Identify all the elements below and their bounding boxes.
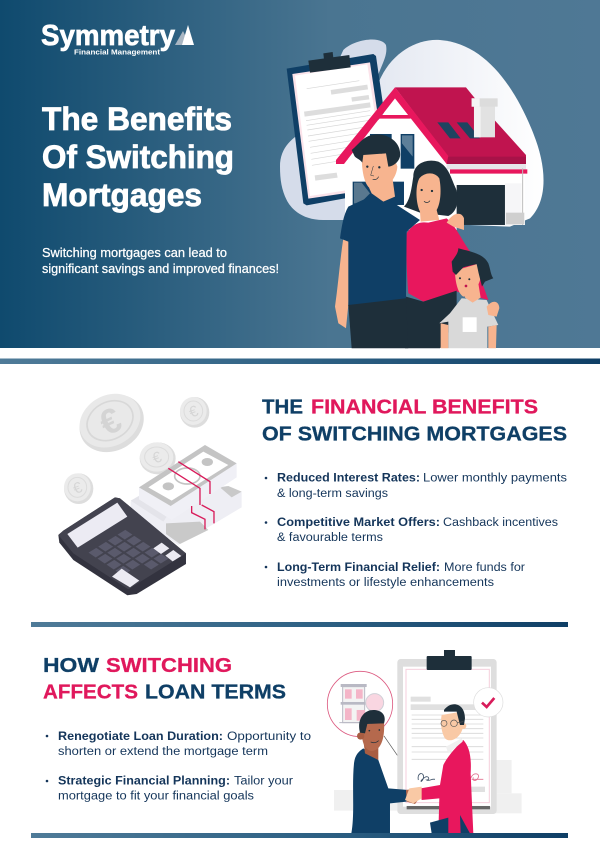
divider bar bbox=[31, 833, 568, 838]
check badge bbox=[474, 688, 503, 717]
bullet list: financial benefits: investments or lifestyle enhancements bbox=[277, 577, 494, 589]
left man bbox=[351, 710, 421, 833]
bullet list: financial benefits: & favourable terms bbox=[277, 532, 383, 544]
bullet list: financial benefits bbox=[265, 472, 567, 589]
panel: hero banner bbox=[0, 0, 600, 348]
title: The Benefits bbox=[42, 101, 232, 137]
white blob bbox=[347, 40, 544, 227]
bullet list: loan terms bbox=[46, 731, 311, 802]
woman bbox=[403, 161, 488, 348]
illustration: calculator, coins and money bbox=[58, 383, 242, 595]
clipboard bbox=[397, 650, 497, 814]
bullet list: loan terms: mortgage to fit your financial goals bbox=[58, 790, 254, 802]
thought bubble bbox=[327, 671, 397, 755]
bullet list: loan terms: Tailor your bbox=[234, 776, 293, 788]
title: Of Switching bbox=[42, 139, 234, 175]
bullet list: financial benefits: Lower monthly payments bbox=[423, 472, 567, 484]
logo: Symmetry bbox=[41, 20, 175, 52]
bullet list: financial benefits: More funds for bbox=[444, 562, 525, 574]
heading: financial benefits bbox=[262, 396, 567, 445]
title: Mortgages bbox=[42, 177, 202, 213]
bullet list: loan terms: Strategic Financial Planning: bbox=[58, 776, 230, 788]
heading: loan terms: AFFECTS bbox=[43, 680, 138, 704]
house bbox=[336, 87, 527, 230]
right man bbox=[405, 704, 473, 833]
heading: loan terms bbox=[43, 654, 286, 704]
light blob bbox=[280, 40, 386, 220]
title bbox=[42, 101, 234, 213]
heading: loan terms: LOAN TERMS bbox=[145, 680, 286, 704]
calculator bbox=[58, 497, 186, 595]
coins bbox=[64, 383, 209, 504]
divider stripe bbox=[0, 358, 600, 364]
heading: financial benefits: FINANCIAL BENEFITS bbox=[311, 396, 538, 418]
coins: € bbox=[93, 400, 128, 444]
bullet list: loan terms: Opportunity to bbox=[227, 731, 311, 743]
bullet list: loan terms: Renegotiate Loan Duration: bbox=[58, 731, 223, 743]
bullet list: financial benefits: Competitive Market Offers: bbox=[277, 517, 440, 529]
heading: loan terms: HOW bbox=[43, 654, 100, 677]
divider bar bbox=[31, 622, 568, 627]
heading: financial benefits: THE bbox=[262, 396, 303, 418]
logo: Financial Management bbox=[74, 48, 161, 56]
bullet list: loan terms: shorten or extend the mortgage term bbox=[58, 746, 268, 758]
illustration: handshake with contract bbox=[327, 650, 522, 833]
heading: loan terms: SWITCHING bbox=[106, 654, 232, 677]
bullet list: financial benefits: Reduced Interest Rates: bbox=[277, 472, 420, 484]
subtitle: Switching mortgages can lead to bbox=[42, 246, 227, 260]
bullet list: financial benefits: & long-term savings bbox=[277, 488, 388, 500]
coins: € bbox=[187, 402, 201, 422]
coins: € bbox=[150, 448, 164, 468]
bullet list: financial benefits: Cashback incentives bbox=[443, 517, 558, 529]
illustration: family and house bbox=[280, 40, 544, 348]
heading: financial benefits: OF SWITCHING MORTGAGES bbox=[262, 422, 567, 445]
coins: € bbox=[71, 479, 85, 498]
subtitle: significant savings and improved finances! bbox=[42, 262, 279, 276]
bullet list: financial benefits: Long-Term Financial Relief: bbox=[277, 562, 440, 574]
subtitle bbox=[42, 246, 279, 276]
child bbox=[439, 248, 499, 348]
money stacks bbox=[131, 445, 242, 545]
background stacks bbox=[334, 760, 522, 813]
man bbox=[335, 134, 420, 348]
clipboard bbox=[287, 52, 390, 205]
